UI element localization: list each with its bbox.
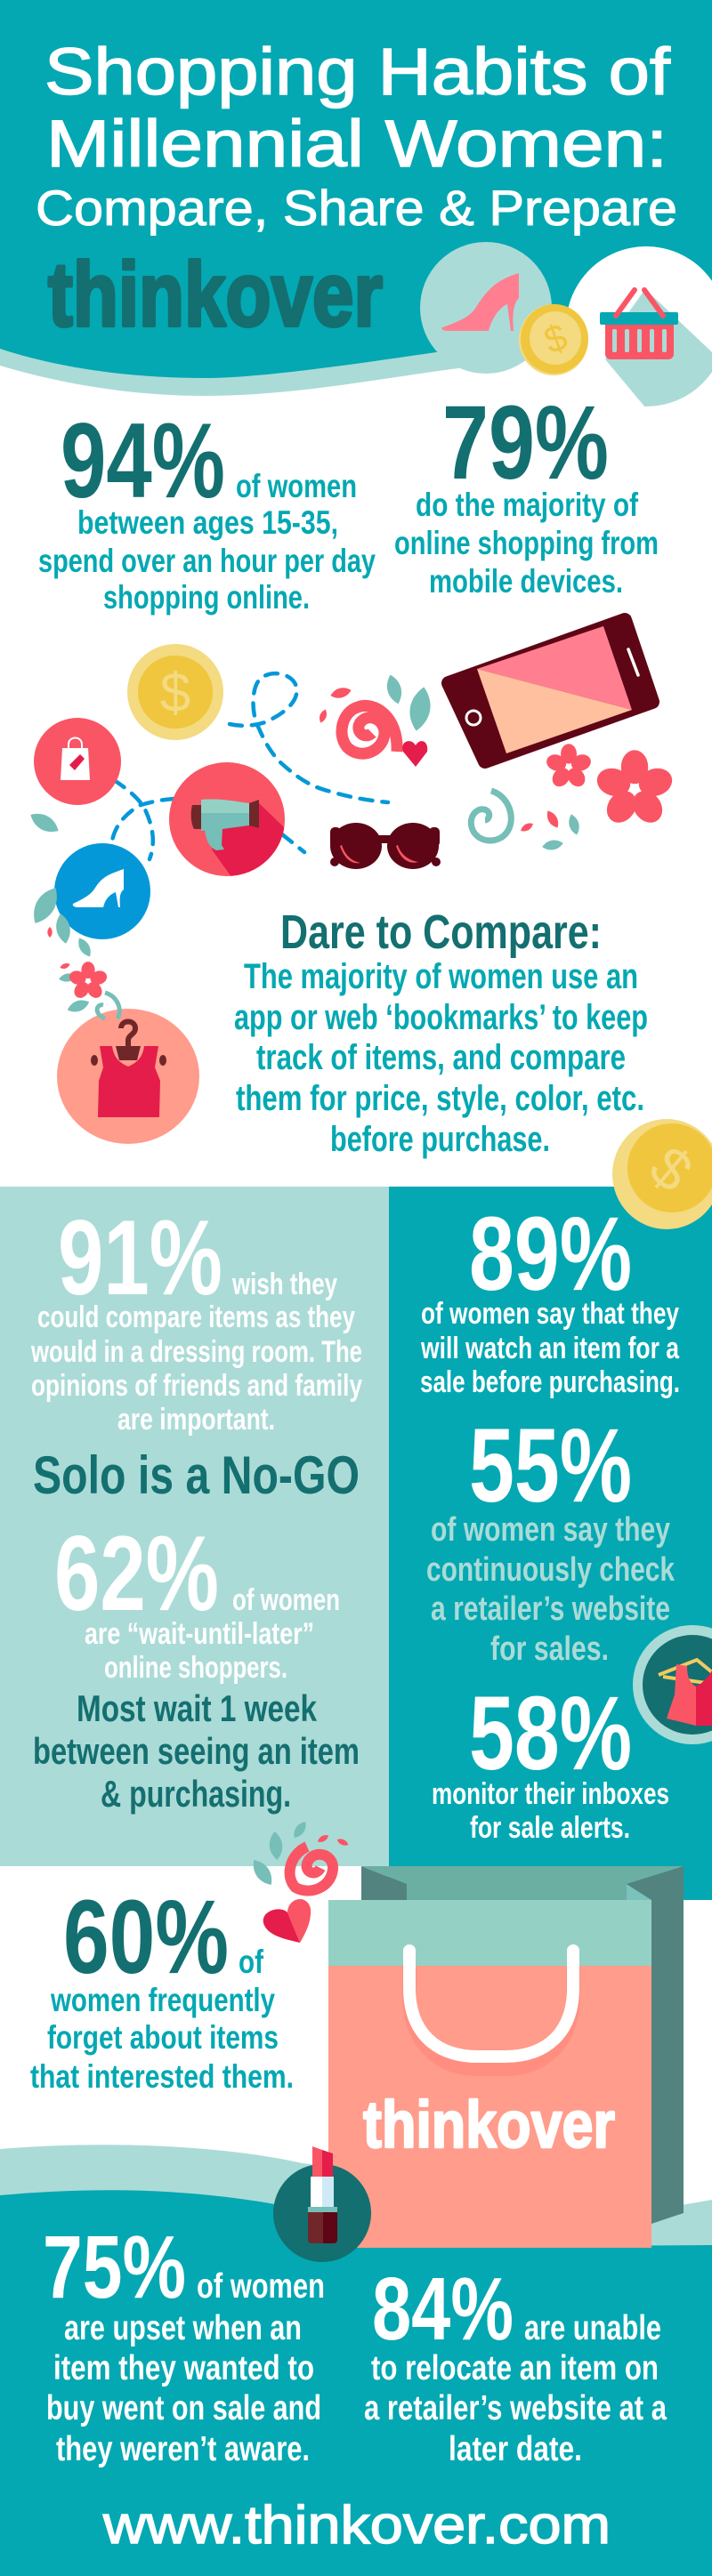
stat: 94% <box>38 401 376 616</box>
stat: 60%: that interested them. <box>30 2058 294 2095</box>
stat: 60%: forget about items <box>47 2019 279 2056</box>
stat: 58%: 58% <box>469 1675 632 1792</box>
icon: blouse on hanger circle <box>633 1625 712 1744</box>
icon: gold coin header: $ <box>538 315 572 362</box>
text block: compare <box>234 957 648 1159</box>
illustration: red flowers <box>545 744 676 828</box>
stat: 60%: 60% <box>63 1879 229 1996</box>
illustration: swirl, leaves and heart above bag <box>248 1819 350 1943</box>
stat: 75%: are upset when an <box>64 2309 302 2347</box>
stat: 60%: of <box>239 1944 264 1980</box>
stat: 91% <box>30 1198 362 1437</box>
stat: 84%: are unable <box>524 2309 661 2347</box>
stat: 62% <box>33 1514 360 1815</box>
stat: 60%: women frequently <box>50 1982 275 2018</box>
stat: 79% <box>394 384 659 600</box>
stat: 75%: of women <box>197 2267 325 2306</box>
icon: shopping bag <box>328 1866 684 2248</box>
icon: shopping bag circle <box>34 718 121 805</box>
icon: shopping bag: thinkover <box>363 2088 615 2161</box>
stat: 62%: & purchasing. <box>101 1773 291 1815</box>
stat: 55% <box>426 1407 676 1668</box>
stat: 91%: 91% <box>58 1198 222 1317</box>
stat: 84% <box>364 2259 667 2468</box>
stat: 75%: they weren’t aware. <box>56 2430 310 2468</box>
icon: high heel bubble <box>420 242 552 374</box>
stat: 91%: could compare items as they <box>37 1300 355 1334</box>
title: Compare, Share & Prepare <box>36 180 677 236</box>
stat: 91%: would in a dressing room. The <box>30 1335 362 1369</box>
stat: 60% <box>30 1879 294 2095</box>
icon: gold coin header <box>519 304 588 375</box>
illustration: decorative leaves and petals left <box>27 809 119 1018</box>
stat: 89%: 89% <box>469 1195 632 1313</box>
stat: 84%: later date. <box>449 2430 582 2468</box>
footer url: www.thinkover.com <box>102 2495 611 2555</box>
title: Shopping Habits of <box>44 35 670 109</box>
stat: 62%: of women <box>232 1583 340 1617</box>
illustration: teal swirl and petals <box>471 791 581 851</box>
stat: 75%: buy went on sale and <box>46 2389 321 2427</box>
heading: Dare to Compare: Dare to Compare: <box>280 906 602 959</box>
stat: 79%: 79% <box>442 384 609 502</box>
logo: thinkover: thinkover <box>48 244 383 345</box>
icon: smartphone <box>449 620 652 761</box>
title <box>36 35 677 236</box>
stat: 79%: mobile devices. <box>429 563 623 600</box>
stat: 62%: are “wait-until-later” <box>85 1617 314 1651</box>
icon: gold coin: $ <box>160 663 190 724</box>
stat: 58% <box>432 1675 669 1845</box>
stat: 94%: shopping online. <box>103 579 310 616</box>
stat: 62%: between seeing an item <box>33 1730 360 1772</box>
stat: 62%: Most wait 1 week <box>77 1687 318 1729</box>
title: Millennial Women: <box>46 107 668 181</box>
icon: lipstick circle <box>273 2146 371 2262</box>
stat: 75%: item they wanted to <box>53 2349 314 2387</box>
stat: 62%: 62% <box>54 1514 219 1633</box>
stat: 89% <box>420 1195 680 1399</box>
heading: Solo is a No-GO: Solo is a No-GO <box>33 1445 360 1505</box>
illustration: dashed paths <box>112 673 388 859</box>
lower wave background <box>0 2145 712 2576</box>
icon: gold coin <box>127 644 223 740</box>
stat: 91%: wish they <box>231 1268 337 1301</box>
stat: 94%: 94% <box>61 401 225 520</box>
illustration: red swirl, heart and leaves <box>318 673 433 767</box>
stat: 58%: for sale alerts. <box>470 1811 630 1845</box>
stat: 84%: 84% <box>372 2259 514 2359</box>
stat: 94%: between ages 15-35, <box>77 504 338 541</box>
stat: 55%: for sales. <box>490 1630 609 1668</box>
stat: 55%: 55% <box>469 1407 632 1525</box>
icon: heel on blue circle <box>54 843 150 939</box>
stat: 79%: do the majority of <box>416 487 639 523</box>
stat: 91%: opinions of friends and family <box>31 1369 362 1403</box>
stat: 94%: spend over an hour per day <box>38 543 376 579</box>
icon: large gold coin: $ <box>638 1133 705 1204</box>
panel: left light teal <box>0 1187 389 1866</box>
icon: sunglasses <box>330 823 441 869</box>
stat: 91%: are important. <box>117 1403 275 1437</box>
icon: large gold coin <box>612 1119 712 1229</box>
text block: compare: before purchase. <box>330 1120 550 1159</box>
icon: shopping basket bubble <box>566 246 712 418</box>
icon: tank top circle <box>57 1009 199 1144</box>
stat: 75%: 75% <box>43 2218 186 2317</box>
stat: 62%: online shoppers. <box>104 1651 287 1685</box>
icon: hair dryer circle <box>169 762 285 876</box>
stat: 75% <box>43 2218 325 2468</box>
panel: right teal <box>389 1187 712 1900</box>
header wave background <box>0 0 712 396</box>
stat: 94%: of women <box>236 468 357 504</box>
